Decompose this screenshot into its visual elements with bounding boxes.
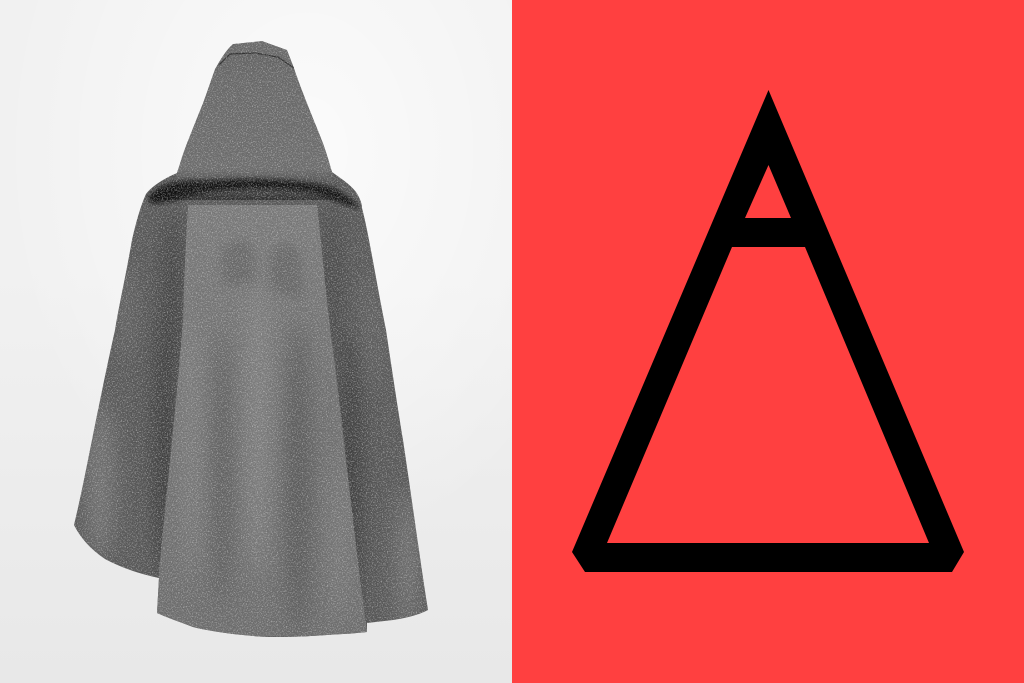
hood <box>165 41 342 200</box>
fabric dark grain <box>60 30 440 645</box>
back layer light shading <box>86 260 419 630</box>
panel: cloak photograph <box>0 0 512 683</box>
front panel fold shading <box>211 320 311 640</box>
front panel light folds <box>184 317 344 565</box>
front panel <box>150 200 375 640</box>
photo background <box>0 0 512 683</box>
icon: black triangle symbol <box>572 90 964 572</box>
collar seam <box>219 53 294 68</box>
cloak back layer <box>60 170 440 640</box>
back layer fold shading <box>153 200 362 630</box>
front panel back shading <box>222 240 304 300</box>
front panel fabric <box>150 200 375 640</box>
hood shadow band <box>148 179 360 208</box>
hood collar <box>228 41 294 68</box>
cloak <box>60 30 440 645</box>
fabric light grain <box>60 30 440 645</box>
panel: red background <box>512 0 1024 683</box>
